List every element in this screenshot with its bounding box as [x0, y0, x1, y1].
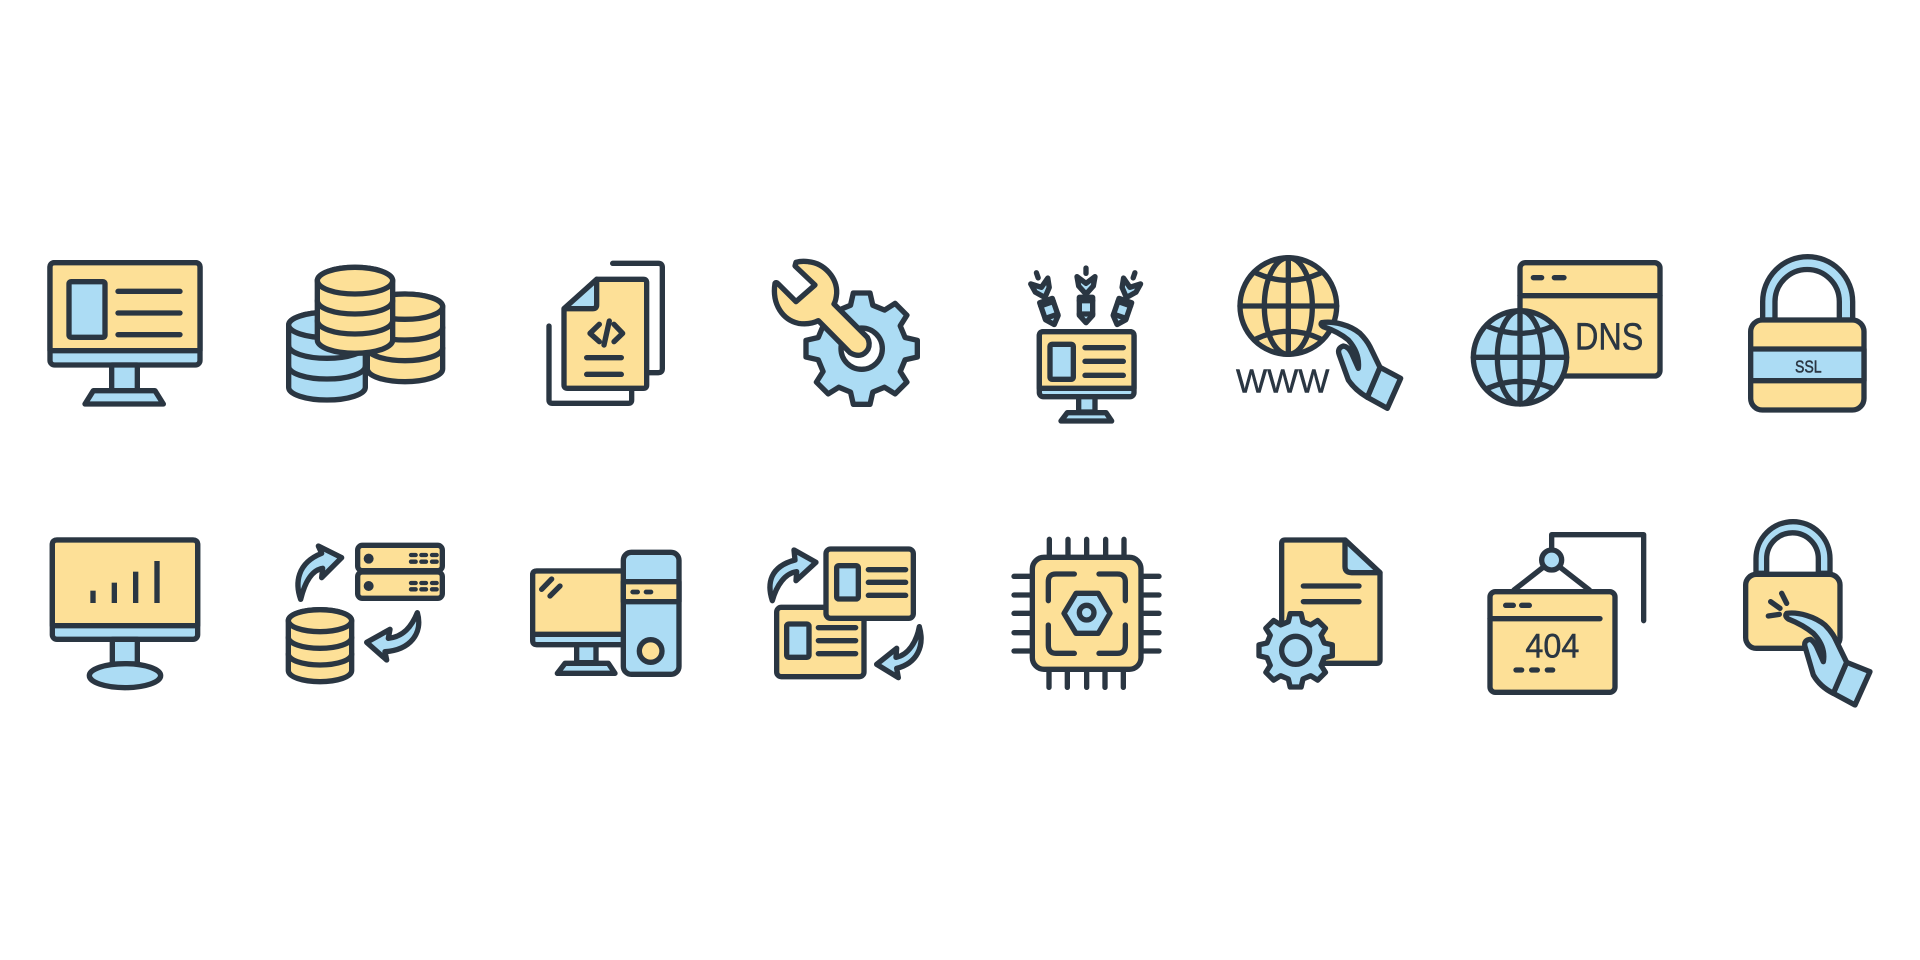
icon: code documents: [549, 263, 662, 403]
label: WWW: WWW: [1236, 363, 1330, 400]
icon: monitor under missiles: [1028, 268, 1143, 421]
icon: wrench and gear: [774, 261, 917, 404]
arrow: up to server: [298, 546, 342, 599]
bar chart: [90, 561, 160, 603]
label: SSL: SSL: [1795, 356, 1822, 376]
icon: card exchange: [770, 549, 921, 678]
icon: padlock with hand: [1746, 522, 1870, 705]
icon: monitor with bar chart: [52, 540, 198, 688]
icon: www globe with hand: [1236, 258, 1401, 408]
arrow: to lower card: [877, 627, 921, 678]
icon: hanging 404 sign: [1490, 535, 1644, 692]
icon: database stacks: [289, 267, 443, 400]
arrow: to upper card: [770, 550, 816, 601]
icon: processor chip: [1014, 539, 1159, 687]
icon: server and database sync: [288, 545, 442, 682]
label: 404: 404: [1525, 627, 1579, 665]
label: DNS: DNS: [1575, 316, 1643, 358]
arrow: down to database: [367, 613, 419, 660]
icon: desktop computer: [533, 552, 679, 674]
icon: SSL padlock: [1751, 257, 1864, 410]
icon: document with gear: [1259, 540, 1380, 687]
icon: DNS window with globe: [1473, 263, 1660, 404]
icon: monitor with profile card: [50, 263, 200, 404]
